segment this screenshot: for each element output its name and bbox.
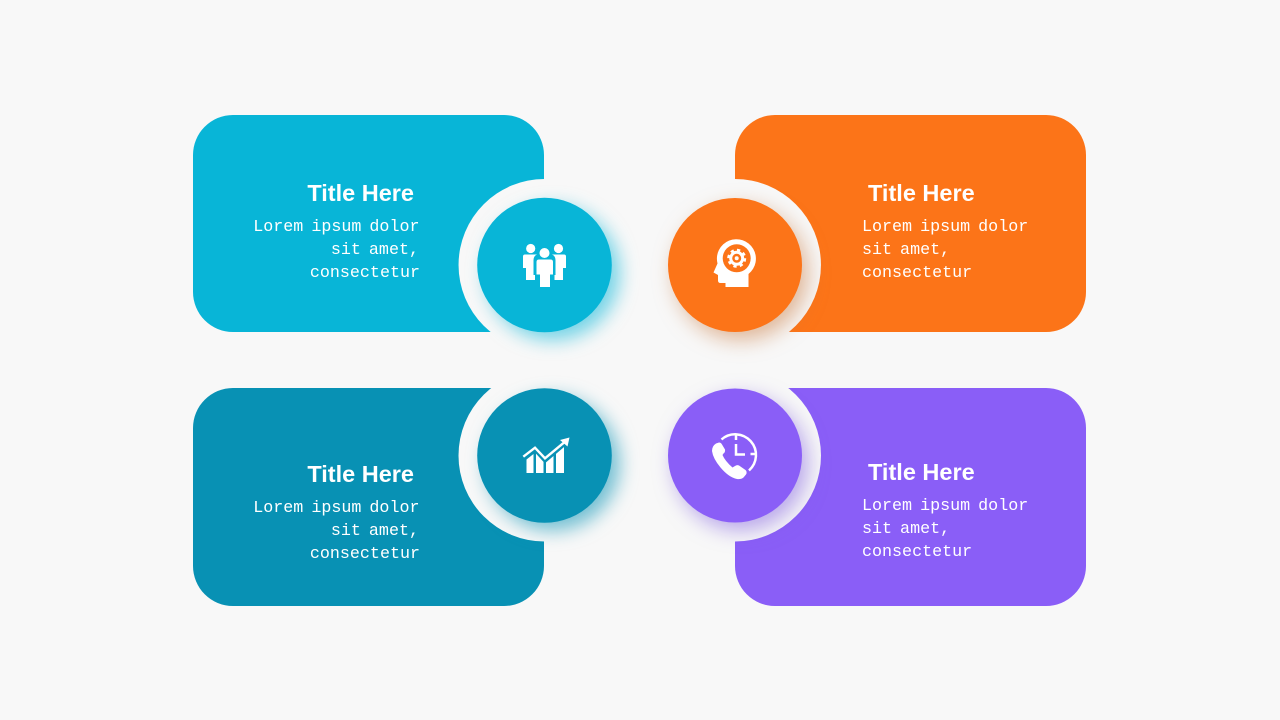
icon: team [523, 244, 566, 287]
body text: bottom-left: consectetur [310, 545, 420, 564]
circle: bottom-left [477, 388, 612, 523]
body text: top-left: consectetur [310, 264, 420, 283]
body text: top-left: Lorem ipsum dolor [253, 218, 420, 237]
panel: bottom-right [640, 370, 1086, 606]
panel: top-right [640, 115, 1086, 351]
card: bottom-left [193, 388, 544, 606]
circle: top-right [668, 198, 802, 332]
title: top-left: Title Here [307, 180, 414, 206]
icon: phone and clock [712, 434, 756, 479]
body text: bottom-left: Lorem ipsum dolor [253, 499, 420, 518]
body text: top-right: consectetur [862, 264, 972, 283]
body text: bottom-right: Lorem ipsum dolor [862, 497, 1028, 516]
body text: top-right: sit amet, [862, 241, 950, 260]
circle: bottom-right [668, 388, 802, 522]
ring cut-out: top-right [640, 179, 821, 351]
body text: bottom-right [862, 497, 1028, 562]
body text: top-right: Lorem ipsum dolor [862, 218, 1028, 237]
title: top-right: Title Here [868, 180, 975, 206]
card: top-left [193, 115, 544, 332]
title: bottom-right: Title Here [868, 459, 975, 485]
body text: top-left [253, 218, 420, 283]
icon: growth chart [521, 438, 570, 473]
ring cut-out: top-left [459, 179, 640, 351]
card: bottom-right [735, 388, 1086, 606]
circle: top-left [477, 198, 612, 332]
body text: top-left: sit amet, [331, 241, 419, 260]
panel: top-left [193, 115, 640, 351]
body text: top-right [862, 218, 1028, 283]
body text: bottom-left: sit amet, [331, 522, 419, 541]
ring cut-out: bottom-left [458, 370, 640, 542]
body text: bottom-right: consectetur [862, 543, 972, 562]
icon: head with gear [714, 239, 756, 287]
body text: bottom-left [253, 499, 420, 564]
card: top-right [735, 115, 1086, 332]
body text: bottom-right: sit amet, [862, 520, 950, 539]
title: bottom-left: Title Here [307, 461, 414, 487]
ring cut-out: bottom-right [640, 370, 821, 542]
panel: bottom-left [193, 370, 640, 606]
